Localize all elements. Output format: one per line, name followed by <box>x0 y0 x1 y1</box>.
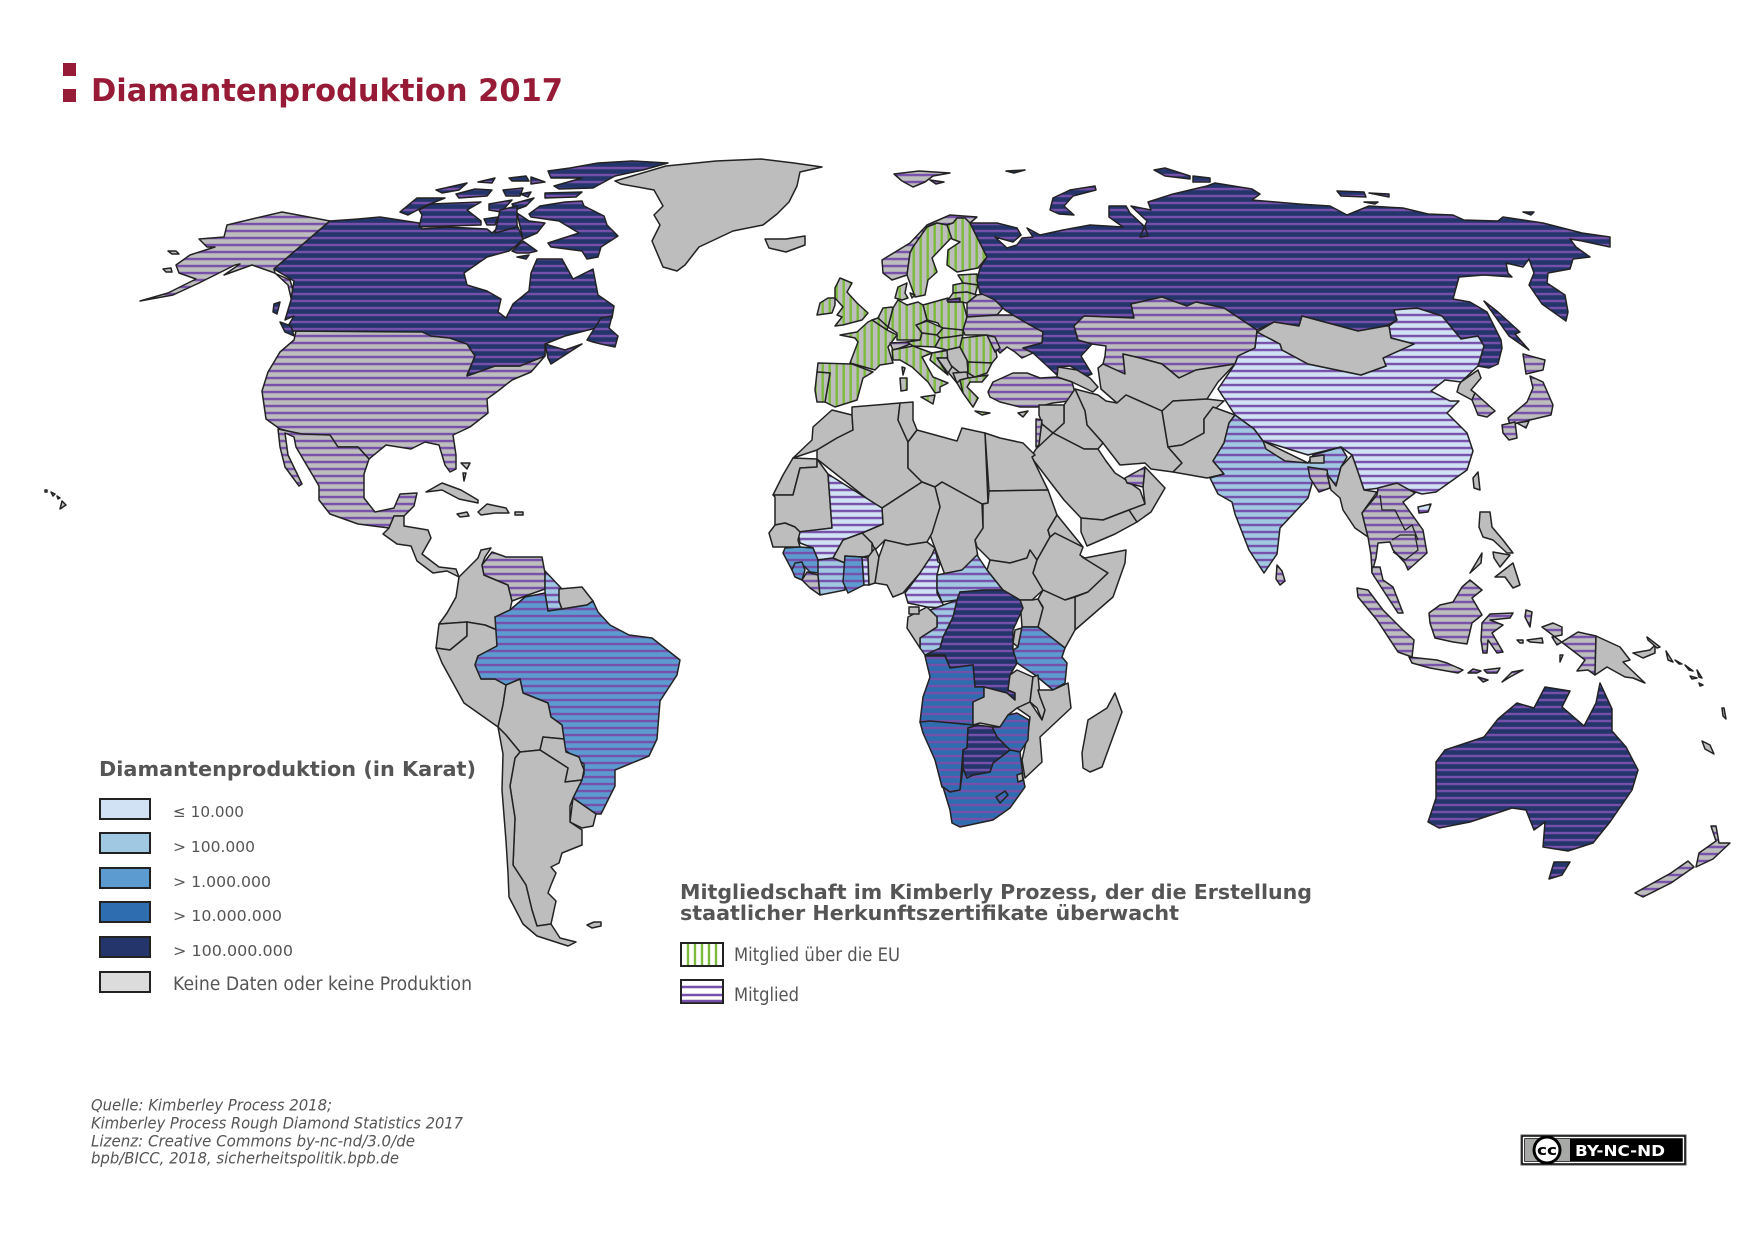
Chad <box>930 482 983 575</box>
Benelux <box>872 307 893 330</box>
India <box>1210 415 1347 573</box>
legend item: no data <box>100 972 472 995</box>
Sierra Leone <box>792 562 805 580</box>
DR Congo <box>925 590 1023 700</box>
Iraq <box>1053 389 1103 449</box>
Tunisia <box>898 402 917 442</box>
source note: Quelle: Kimberley Process 2018; <box>91 1096 332 1114</box>
membership heading <box>680 880 1312 925</box>
Malawi <box>1030 675 1045 720</box>
region: Oceania <box>1428 683 1730 897</box>
region: Middle East <box>1031 389 1165 546</box>
source note: Lizenz: Creative Commons by-nc-nd/3.0/de <box>91 1132 415 1150</box>
Borneo <box>1429 580 1482 644</box>
Mongolia <box>1257 316 1414 375</box>
Israel <box>1036 419 1042 447</box>
Kaliningrad <box>947 298 960 302</box>
Russia <box>970 183 1610 376</box>
Argentina <box>510 750 582 926</box>
Poland <box>923 298 967 330</box>
New Zealand <box>1635 826 1730 897</box>
Sri Lanka <box>1276 565 1285 585</box>
Paraguay <box>540 737 584 782</box>
Svalbard <box>894 171 950 187</box>
Denmark <box>895 283 915 300</box>
Central America <box>383 516 459 577</box>
legend item: over 100,000,000: > 100.000.000 <box>173 942 293 960</box>
region: Africa <box>769 402 1126 827</box>
Senegal and neighbours <box>769 523 800 547</box>
Brazil <box>475 593 680 814</box>
Turkey <box>988 373 1077 407</box>
Kazakhstan <box>1074 297 1257 378</box>
Arctic islands of Russia <box>1006 168 1534 215</box>
Sweden <box>907 223 952 297</box>
Switzerland <box>890 342 913 350</box>
Gabon <box>907 607 937 648</box>
Egypt <box>985 433 1048 491</box>
Malay Peninsula <box>1372 567 1403 613</box>
Balkan land base <box>932 347 978 407</box>
legend item: over 1,000,000 <box>100 868 271 891</box>
Canadian islands <box>273 161 668 364</box>
Jordan <box>1037 424 1053 447</box>
Pacific islands <box>1633 637 1726 754</box>
Sumatra <box>1357 588 1414 657</box>
Colombia <box>439 548 512 630</box>
Cote d'Ivoire <box>818 558 845 595</box>
Yemen <box>1081 510 1137 546</box>
Benin <box>868 548 879 585</box>
Liberia <box>802 572 820 595</box>
United Arab Emirates <box>1125 467 1145 487</box>
Mauritania <box>773 459 832 532</box>
title marker <box>63 63 76 102</box>
Burkina Faso <box>833 533 872 563</box>
China <box>1218 308 1484 494</box>
Sulawesi <box>1481 613 1513 653</box>
Mali <box>798 474 883 560</box>
world map <box>45 159 1730 946</box>
Romania <box>960 335 997 363</box>
Peru <box>436 622 506 727</box>
legend item: over 10,000,000: > 10.000.000 <box>173 907 282 925</box>
source note <box>91 1096 464 1168</box>
Baltic states <box>948 274 978 303</box>
Zambia <box>973 670 1033 727</box>
legend: Kimberley Process membership <box>680 880 1312 1006</box>
title: Diamantenproduktion 2017 <box>91 73 563 109</box>
Greenland <box>615 159 822 271</box>
legend item: over 100,000 <box>100 833 255 856</box>
Mainland Southeast Asia <box>1362 483 1427 572</box>
Western Balkans <box>937 347 968 383</box>
Belarus <box>967 293 1003 317</box>
Canada <box>274 217 614 376</box>
Philippines <box>1470 512 1520 588</box>
Uruguay <box>570 798 596 828</box>
source note: Kimberley Process Rough Diamond Statistics 2017 <box>91 1114 464 1132</box>
Oman <box>1129 467 1165 522</box>
licence badge: BY-NC-ND <box>1575 1142 1665 1160</box>
membership heading: Mitgliedschaft im Kimberly Prozess, der die Erstellung <box>680 880 1312 904</box>
Java <box>1409 657 1463 673</box>
Botswana <box>963 725 1010 778</box>
Bolivia <box>498 679 564 752</box>
membership item: member: Mitglied <box>734 985 799 1006</box>
Caribbean islands <box>426 463 523 517</box>
North Korea <box>1457 370 1481 400</box>
legend: diamond production <box>99 757 476 995</box>
Namibia <box>920 721 978 792</box>
Norway <box>882 215 977 280</box>
Libya <box>908 428 988 504</box>
Caucasus <box>1057 367 1098 392</box>
legend item: up to 10,000: ≤ 10.000 <box>173 803 244 821</box>
Papua New Guinea <box>1595 636 1645 683</box>
Ethiopia <box>1033 533 1108 600</box>
legend item: over 1,000,000: > 1.000.000 <box>173 873 271 891</box>
Central Asian republics <box>1098 354 1235 411</box>
Algeria <box>817 403 922 508</box>
Ireland <box>817 298 835 315</box>
Suriname and French Guiana <box>559 587 593 609</box>
Alaska <box>140 212 330 301</box>
Nigeria <box>875 540 935 597</box>
legend item: over 100,000,000 <box>100 937 293 960</box>
Kenya <box>1038 590 1075 648</box>
legend item: over 10,000,000 <box>100 902 282 925</box>
Bulgaria <box>968 362 992 377</box>
Falkland Islands <box>587 922 601 928</box>
Pakistan <box>1168 407 1235 478</box>
Sudan <box>975 490 1057 563</box>
United Kingdom <box>835 278 868 326</box>
Central African Republic <box>937 555 1003 602</box>
Moldova <box>987 335 1000 352</box>
Republic of Congo <box>920 600 957 655</box>
Ghana <box>843 556 864 593</box>
Indonesian islands <box>1468 610 1563 682</box>
Greece <box>960 375 988 407</box>
membership heading: staatlicher Herkunftszertifikate überwacht <box>680 901 1179 925</box>
region: Russia and Central Asia <box>947 168 1610 478</box>
Hainan <box>1418 504 1431 513</box>
Germany <box>888 300 927 340</box>
Eswatini <box>1017 773 1023 782</box>
licence badge <box>1521 1135 1686 1165</box>
region: North America <box>45 159 822 577</box>
Italy <box>892 346 948 393</box>
region: South America <box>436 548 680 946</box>
Tanzania <box>1013 627 1067 690</box>
Taiwan <box>1473 472 1480 490</box>
South Korea <box>1472 393 1495 417</box>
Equatorial Guinea <box>909 607 919 614</box>
Hawaii and Aleutian islets <box>45 251 179 509</box>
Iran <box>1075 389 1182 472</box>
Eritrea <box>1048 515 1083 547</box>
Bangladesh <box>1308 467 1330 492</box>
legend item: no data: Keine Daten oder keine Produktion <box>173 974 472 995</box>
Venezuela <box>482 552 545 601</box>
region: Asia <box>1210 308 1726 754</box>
Mediterranean islands <box>900 367 1028 417</box>
Madagascar <box>1082 693 1122 772</box>
Niger <box>862 482 940 550</box>
Central Europe EU states <box>907 321 963 350</box>
licence badge: cc <box>1537 1143 1557 1159</box>
Rwanda and Burundi <box>1013 628 1022 647</box>
USA <box>262 331 545 472</box>
Spain <box>817 363 873 407</box>
Zimbabwe <box>992 713 1029 752</box>
Laos and Cambodia borders <box>1380 495 1418 560</box>
Japan <box>1502 354 1553 440</box>
Sakhalin <box>1484 301 1529 350</box>
Myanmar <box>1327 455 1377 537</box>
region: Europe <box>815 171 1043 417</box>
Mexico <box>278 429 417 528</box>
Tasmania <box>1549 862 1570 879</box>
France <box>840 320 897 370</box>
source note: bpb/BICC, 2018, sicherheitspolitik.bpb.de <box>91 1148 399 1168</box>
Nepal <box>1263 441 1308 463</box>
legend heading: Diamantenproduktion (in Karat) <box>99 757 476 781</box>
Portugal <box>815 372 830 402</box>
Guinea <box>783 547 819 573</box>
Iceland <box>765 236 805 252</box>
Western Sahara <box>773 458 817 495</box>
title block <box>63 63 563 109</box>
Afghanistan <box>1162 399 1224 447</box>
Ukraine <box>963 315 1043 358</box>
Western New Guinea <box>1542 623 1596 675</box>
Australia <box>1428 683 1638 851</box>
Cameroon <box>905 548 945 608</box>
membership item: member <box>681 980 799 1006</box>
Saudi Arabia <box>1031 433 1145 520</box>
Guyana <box>545 571 562 611</box>
Morocco <box>793 410 853 458</box>
South Africa <box>943 750 1025 827</box>
Bhutan <box>1310 455 1324 463</box>
Ecuador <box>436 622 467 650</box>
Somalia <box>1075 550 1126 630</box>
Syria <box>1039 405 1064 433</box>
Lesotho <box>996 791 1008 803</box>
membership item: via EU: Mitglied über die EU <box>734 945 900 966</box>
membership item: via EU <box>681 943 900 966</box>
legend item: up to 10,000 <box>100 799 244 821</box>
Chile <box>498 727 576 946</box>
Finland <box>947 218 987 272</box>
Angola <box>920 656 984 725</box>
Croatia <box>930 350 950 375</box>
Mozambique <box>1017 683 1071 778</box>
South Sudan <box>987 550 1043 600</box>
legend item: over 100,000: > 100.000 <box>173 838 255 856</box>
Uganda <box>1020 599 1043 627</box>
Togo <box>862 557 869 585</box>
